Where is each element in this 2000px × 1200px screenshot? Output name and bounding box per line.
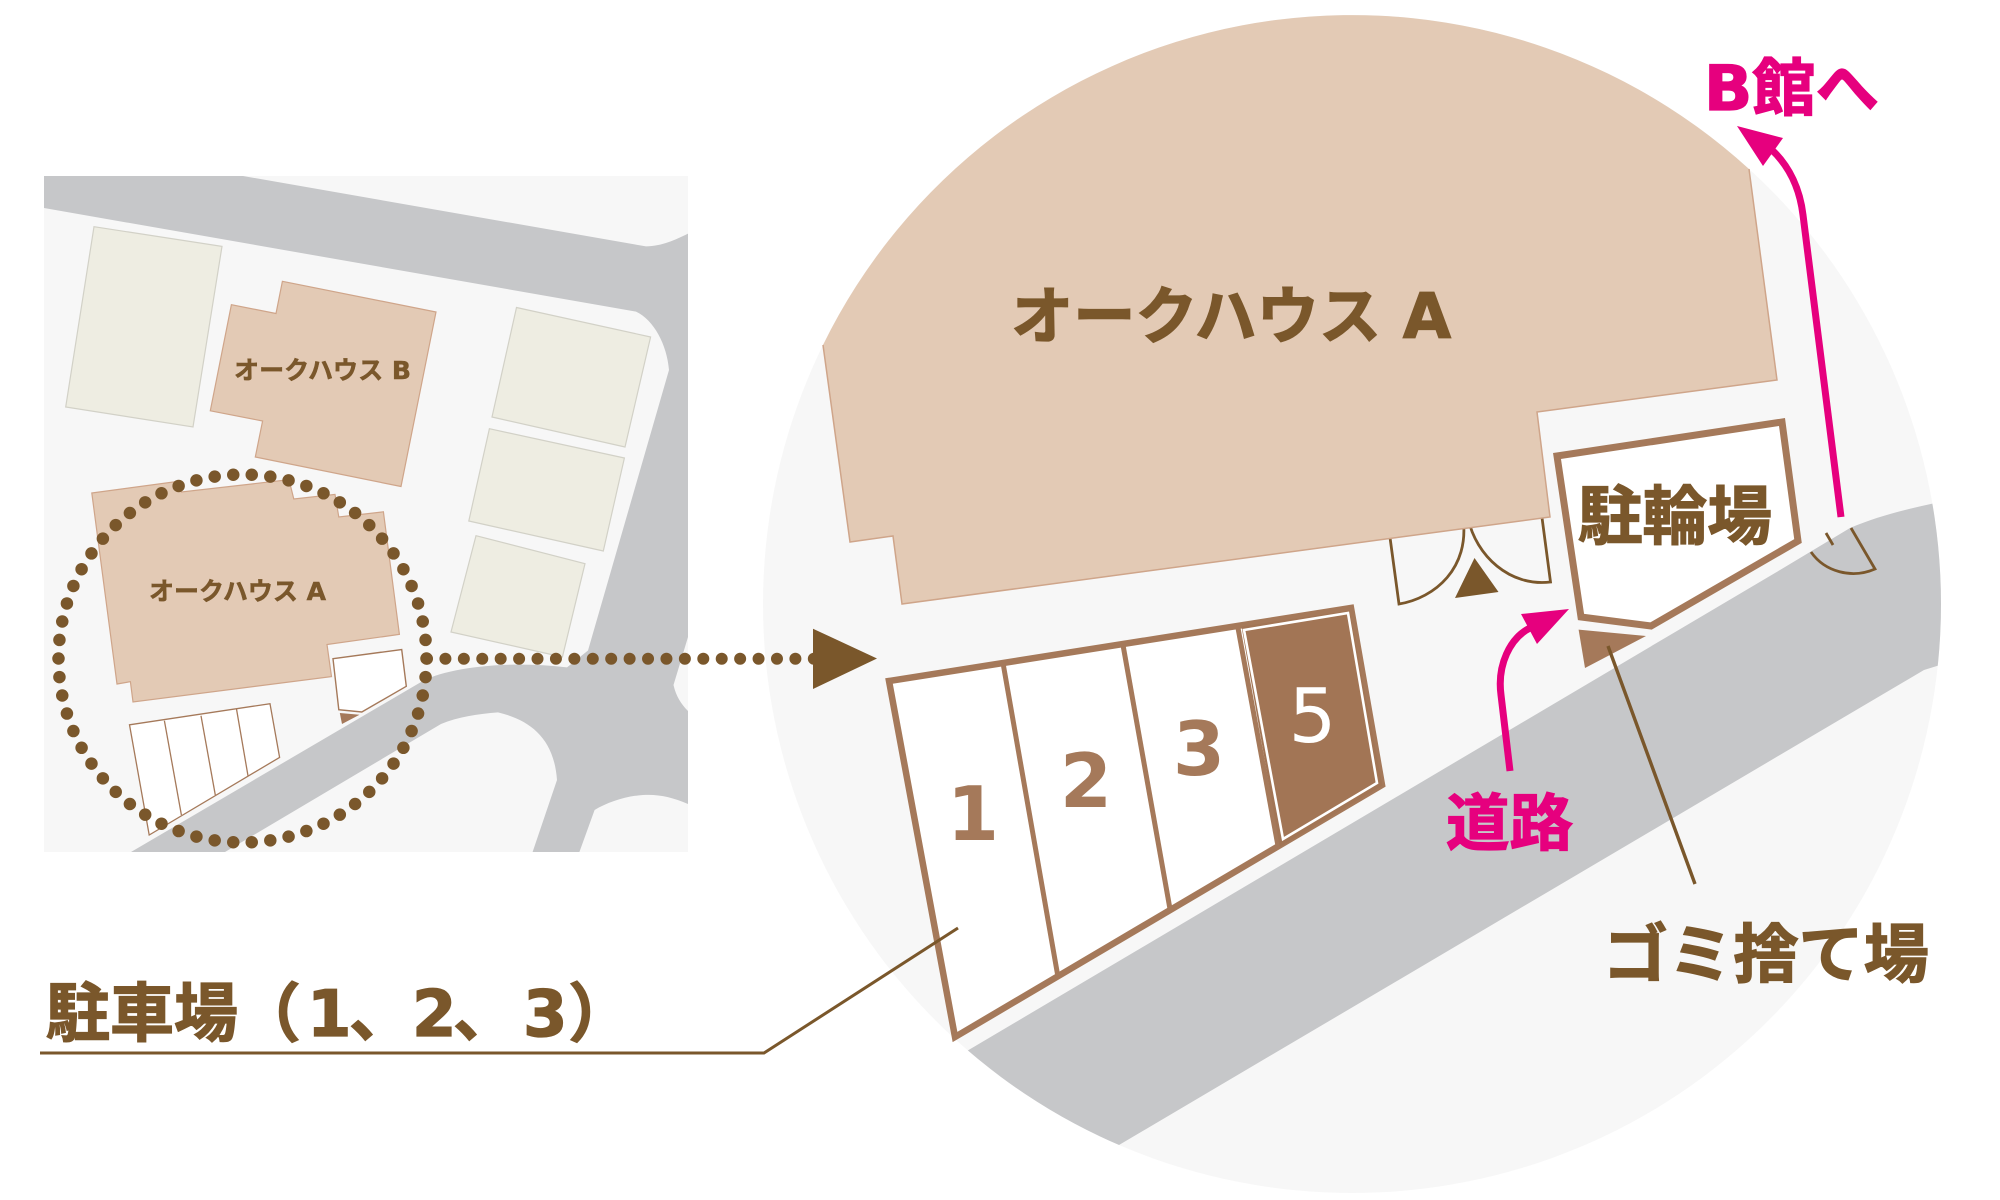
leader line: garbage area — [1608, 646, 1695, 884]
parking space 5 — [1245, 614, 1379, 842]
label: Oak House B: オークハウス B — [234, 356, 411, 385]
building: Oak House A enlarged — [823, 15, 1777, 604]
garbage area — [1579, 630, 1646, 668]
car parking block — [889, 608, 1382, 1037]
building: Oak House A — [92, 480, 399, 702]
road in enlarged view — [950, 500, 1950, 1160]
circle ground — [763, 15, 1941, 1193]
neighbouring building 4 — [451, 536, 585, 657]
neighbouring building 2 — [492, 308, 651, 447]
number 3: 3 — [1173, 705, 1225, 793]
neighbouring building 1 — [66, 227, 222, 427]
label: car parking spaces: 3 — [523, 978, 568, 1052]
number 2: 2 — [1060, 737, 1112, 825]
label: Oak House A enlarged: オークハウス A — [1011, 280, 1451, 353]
building: Oak House B — [210, 281, 436, 486]
label: to building B: B館へ — [1704, 52, 1879, 125]
number 5: 5 — [1289, 672, 1336, 760]
small car parking — [130, 704, 280, 835]
panel: overview site map — [44, 176, 688, 852]
label: car parking spaces: （ — [237, 978, 301, 1052]
neighbouring building 3 — [469, 429, 624, 551]
small bicycle parking — [333, 650, 406, 712]
label: car parking spaces: 、 — [453, 978, 517, 1052]
label: bicycle parking: 駐輪場 — [1578, 481, 1772, 555]
map ground — [44, 176, 688, 852]
leader line: car parking — [40, 928, 958, 1053]
parking outline — [889, 608, 1382, 1037]
label: car parking spaces: 2 — [412, 978, 457, 1052]
bicycle parking — [1557, 422, 1798, 626]
label: road: 道路 — [1446, 787, 1573, 860]
label: car parking spaces: 1 — [307, 978, 352, 1052]
label: car parking spaces: 、 — [349, 978, 413, 1052]
label: car parking spaces: ） — [568, 978, 632, 1052]
divider lines — [1003, 628, 1278, 977]
side door — [1811, 528, 1875, 574]
number 1: 1 — [947, 770, 999, 858]
roads on overview map — [44, 176, 688, 852]
label: garbage area: ゴミ捨て場 — [1603, 919, 1929, 993]
label: Oak House A: オークハウス A — [149, 577, 327, 606]
arrow: from road — [1500, 609, 1569, 771]
entrance doors — [1389, 510, 1550, 604]
label: car parking spaces: 駐車場 — [46, 978, 238, 1052]
dotted circle highlighting area — [58, 474, 426, 842]
arrow: to building B — [1737, 126, 1841, 517]
arrow: zoom connector — [427, 629, 877, 689]
small garbage area — [340, 713, 360, 724]
entrance marker triangle — [1455, 558, 1498, 598]
